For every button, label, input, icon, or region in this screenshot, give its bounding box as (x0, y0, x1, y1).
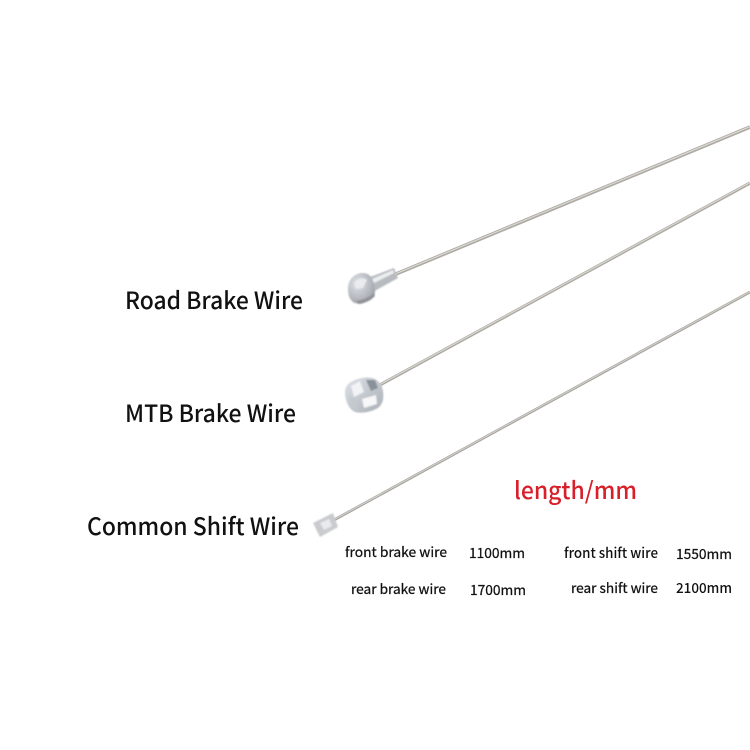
spec label: front brake wire: front brake wire (345, 542, 447, 562)
label: Road Brake Wire: Road Brake Wire (125, 281, 303, 316)
spec label: rear shift wire: rear shift wire (571, 578, 658, 598)
spec value: 1100mm: 1100mm (469, 543, 525, 563)
icon: shift wire cylinder end (313, 513, 338, 537)
spec table (345, 542, 732, 600)
spec label: rear brake wire: rear brake wire (351, 579, 446, 599)
icon: road brake cable end (348, 268, 398, 304)
heading: length/mm: length/mm (514, 471, 637, 506)
spec label: front shift wire: front shift wire (564, 543, 658, 563)
label: Common Shift Wire: Common Shift Wire (87, 507, 299, 542)
wire: MTB brake (378, 183, 750, 386)
wire: road brake (396, 127, 750, 274)
label: MTB Brake Wire: MTB Brake Wire (125, 394, 296, 429)
spec value: 1700mm: 1700mm (470, 580, 526, 600)
wire: common shift (334, 292, 750, 520)
spec value: 2100mm: 2100mm (676, 578, 732, 598)
spec value: 1550mm: 1550mm (676, 544, 732, 564)
icon: MTB brake barrel end (345, 377, 383, 413)
